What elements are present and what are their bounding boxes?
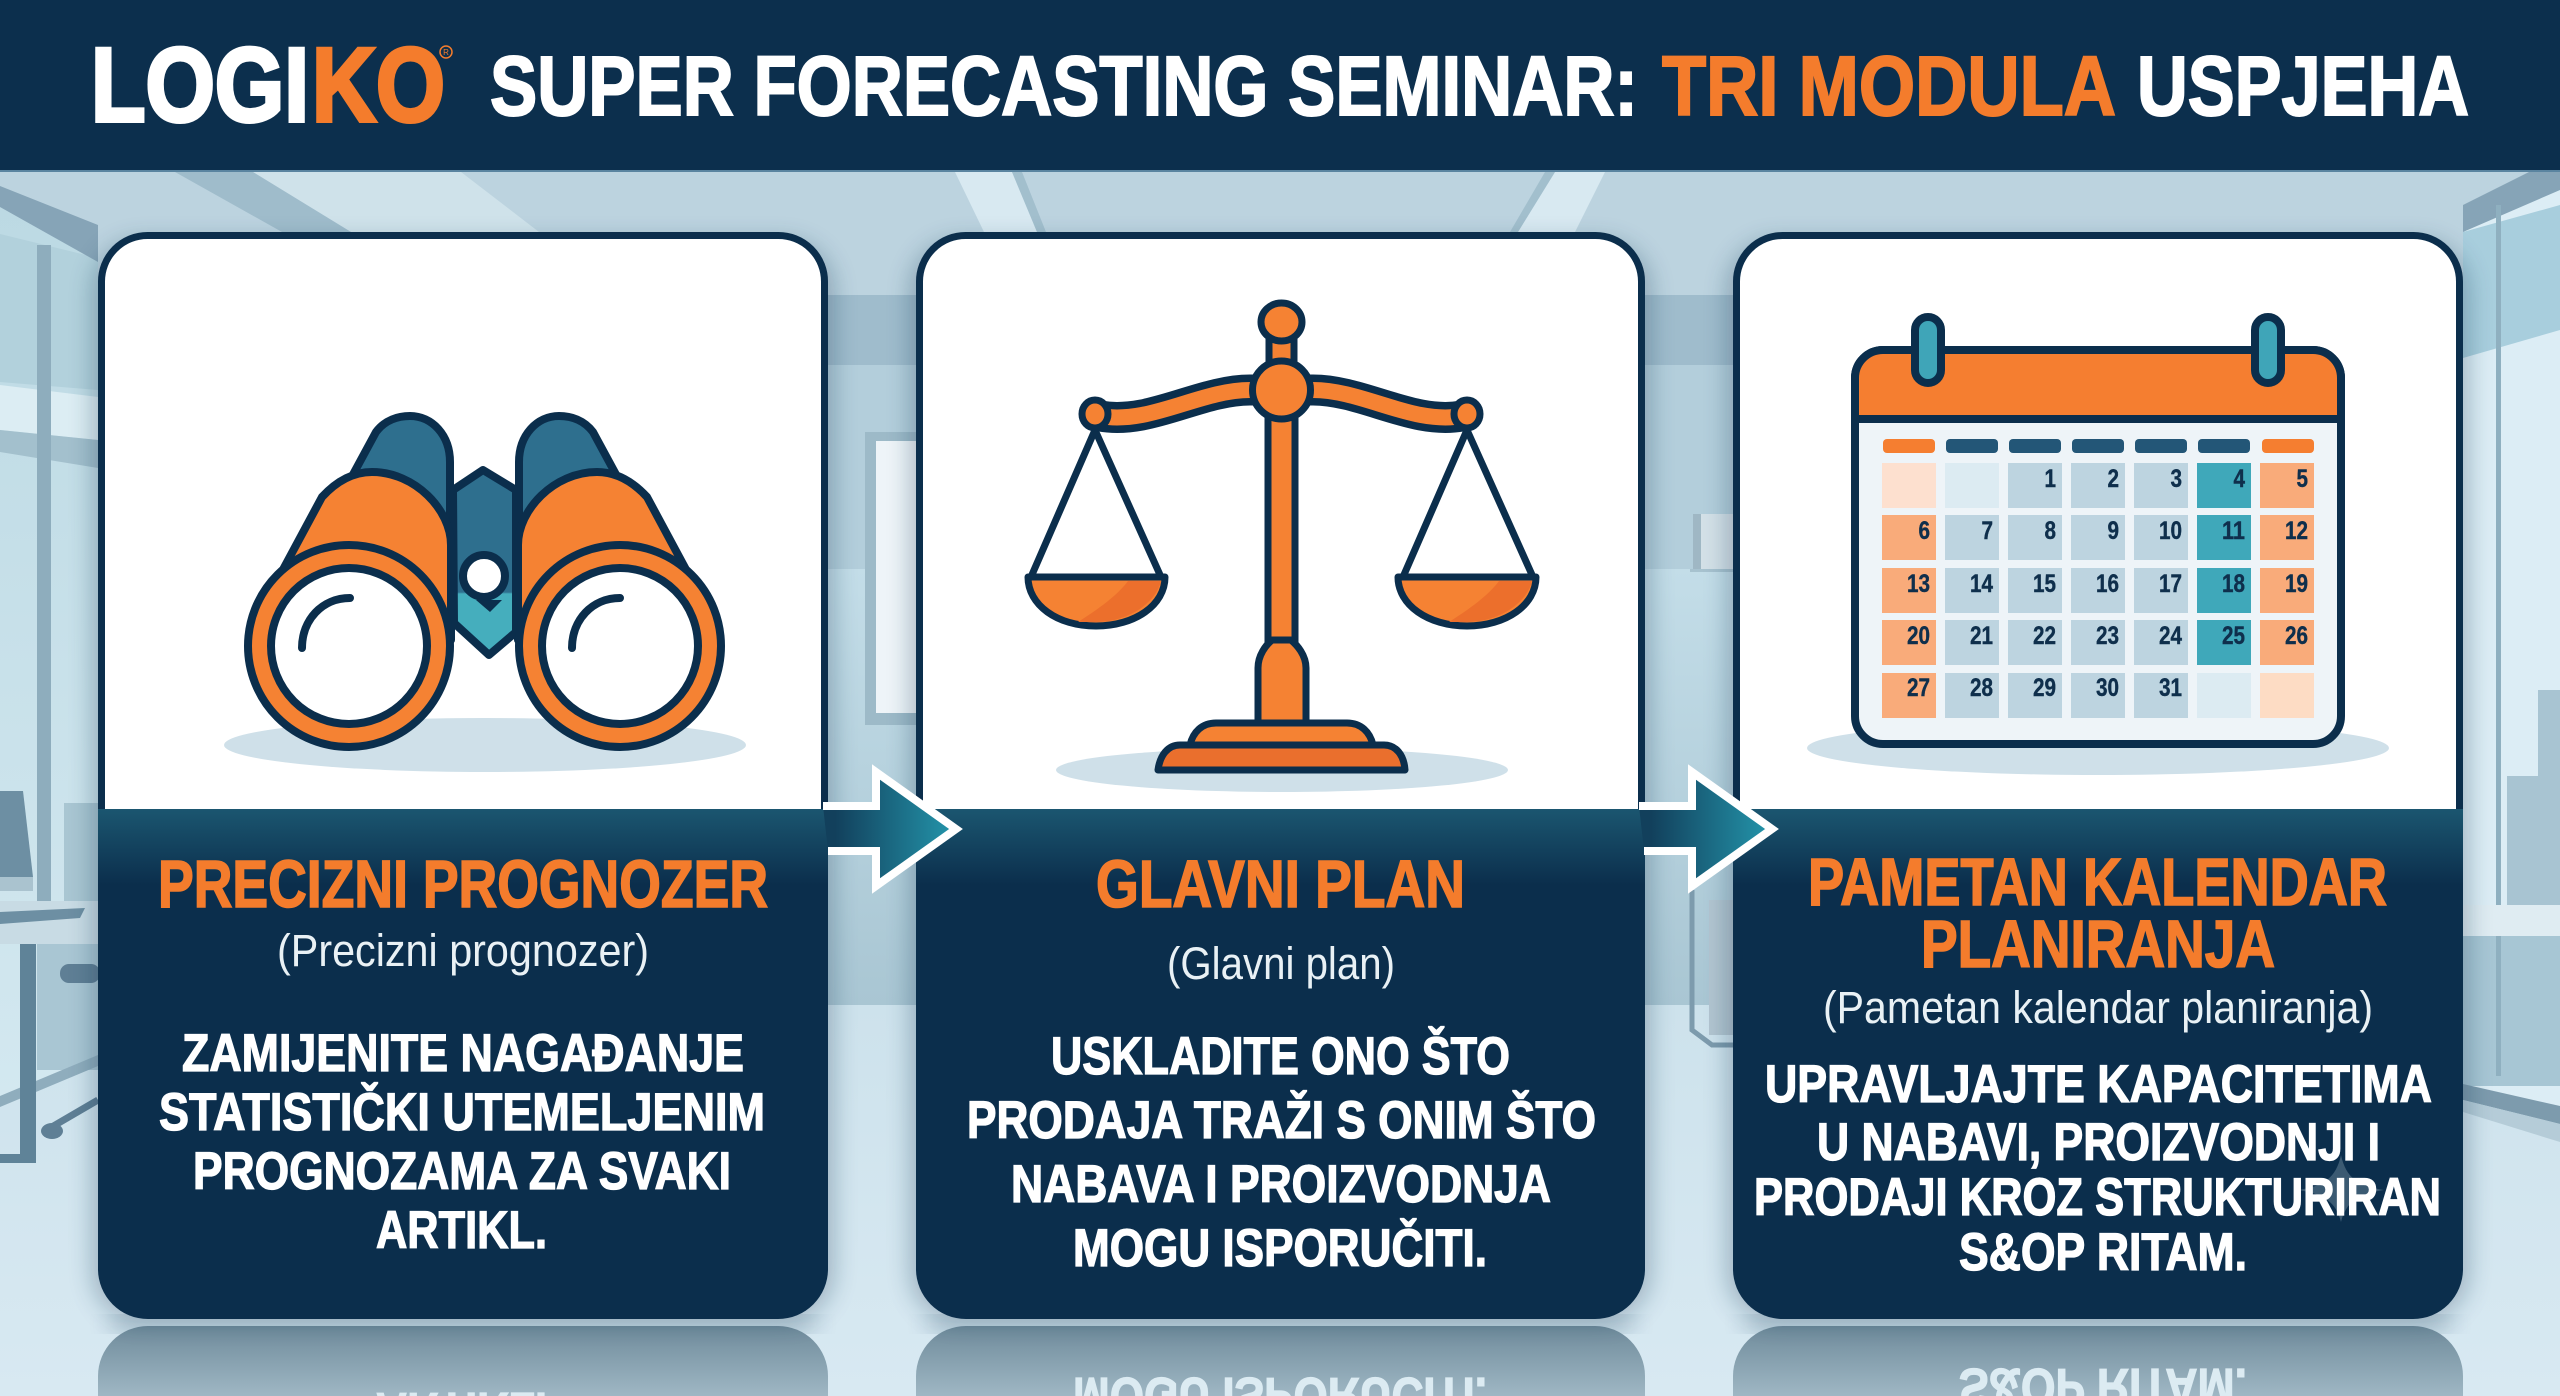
description — [159, 1024, 765, 1260]
subtitle: (Glavni plan) — [1167, 938, 1395, 989]
date numbers — [1907, 465, 2308, 702]
description: UPRAVLJAJTE KAPACITETIMA — [1765, 1055, 2432, 1114]
subtitle: (Precizni prognozer) — [277, 925, 649, 976]
heading: PAMETAN KALENDAR — [1808, 845, 2387, 920]
description: STATISTIČKI UTEMELJENIM — [159, 1081, 765, 1142]
weekday pills — [1883, 439, 2314, 453]
description: ARTIKL. — [376, 1201, 547, 1260]
date numbers: 21 — [1970, 622, 1993, 650]
date numbers: 13 — [1907, 570, 1930, 598]
text block: Glavni plan — [967, 847, 1596, 1278]
description: S&OP RITAM. — [1959, 1223, 2247, 1282]
gap 2 bin — [1692, 890, 1740, 1045]
date numbers: 26 — [2285, 622, 2308, 650]
date numbers: 16 — [2096, 570, 2119, 598]
icon: binoculars — [224, 416, 746, 772]
description: USKLADITE ONO ŠTO — [1051, 1025, 1510, 1086]
title: SUPER FORECASTING SEMINAR: — [490, 39, 1638, 133]
panel: Pametan kalendar planiranja — [1727, 235, 2469, 1322]
arrow: module 1 to module 2 — [823, 772, 956, 886]
date numbers: 15 — [2033, 570, 2056, 598]
sparkle mark — [2298, 1155, 2384, 1222]
date numbers: 10 — [2159, 517, 2182, 545]
heading: PLANIRANJA — [1921, 907, 2275, 982]
description: MOGU ISPORUČITI. — [1073, 1217, 1487, 1278]
right window — [2463, 170, 2560, 1120]
date numbers: 7 — [1982, 517, 1993, 545]
date numbers: 2 — [2108, 465, 2119, 493]
logo: LOGI — [91, 27, 309, 144]
date numbers: 27 — [1907, 674, 1930, 702]
date numbers: 17 — [2159, 570, 2182, 598]
heading: PRECIZNI PROGNOZER — [158, 847, 768, 922]
description — [1754, 1055, 2441, 1282]
date numbers: 11 — [2222, 517, 2245, 545]
date numbers: 23 — [2096, 622, 2119, 650]
panel: Precizni prognozer — [92, 235, 834, 1322]
date numbers: 12 — [2285, 517, 2308, 545]
date numbers: 20 — [1907, 622, 1930, 650]
date numbers: 28 — [1970, 674, 1993, 702]
floor reflections of the cards — [98, 1316, 2463, 1396]
date numbers: 4 — [2234, 465, 2245, 493]
date numbers: 14 — [1970, 570, 1993, 598]
logo: KO — [312, 27, 445, 144]
logo: R — [443, 48, 449, 57]
title — [490, 39, 2469, 133]
date numbers: 5 — [2296, 465, 2308, 493]
date numbers: 19 — [2285, 570, 2308, 598]
date numbers: 6 — [1918, 517, 1930, 545]
left window — [0, 200, 98, 1096]
gap 1 window — [865, 432, 925, 725]
heading — [1808, 845, 2387, 982]
date numbers: 22 — [2033, 622, 2056, 650]
header bar — [0, 0, 2560, 172]
icon: balance scale — [1028, 303, 1536, 792]
description — [967, 1025, 1596, 1278]
title: USPJEHA — [2137, 39, 2469, 133]
date numbers: 29 — [2033, 674, 2056, 702]
date numbers: 9 — [2108, 517, 2119, 545]
date numbers: 1 — [2044, 465, 2056, 493]
date numbers: 25 — [2222, 622, 2245, 650]
date numbers: 3 — [2170, 465, 2182, 493]
description: NABAVA I PROIZVODNJA — [1011, 1155, 1551, 1214]
date numbers: 31 — [2159, 674, 2182, 702]
description: PROGNOZAMA ZA SVAKI — [193, 1142, 731, 1201]
panel: Glavni plan — [910, 235, 1651, 1322]
title: TRI MODULA — [1662, 39, 2116, 133]
text block: Pametan kalendar planiranja — [1754, 845, 2441, 1282]
description: PRODAJA TRAŽI S ONIM ŠTO — [967, 1089, 1596, 1150]
subtitle: (Pametan kalendar planiranja) — [1823, 982, 2373, 1033]
text block: Precizni prognozer — [158, 847, 768, 1260]
date numbers: 24 — [2159, 622, 2182, 650]
date numbers: 18 — [2222, 570, 2245, 598]
arrow: module 2 to module 3 — [1639, 772, 1772, 886]
gap 2 printer — [1693, 514, 1735, 569]
date cells — [1882, 463, 2314, 718]
date numbers: 30 — [2096, 674, 2119, 702]
description: U NABAVI, PROIZVODNJI I — [1817, 1113, 2380, 1172]
description: ZAMIJENITE NAGAĐANJE — [182, 1024, 744, 1083]
date numbers: 8 — [2044, 517, 2056, 545]
heading: GLAVNI PLAN — [1096, 847, 1465, 922]
icon: calendar — [1807, 317, 2389, 775]
